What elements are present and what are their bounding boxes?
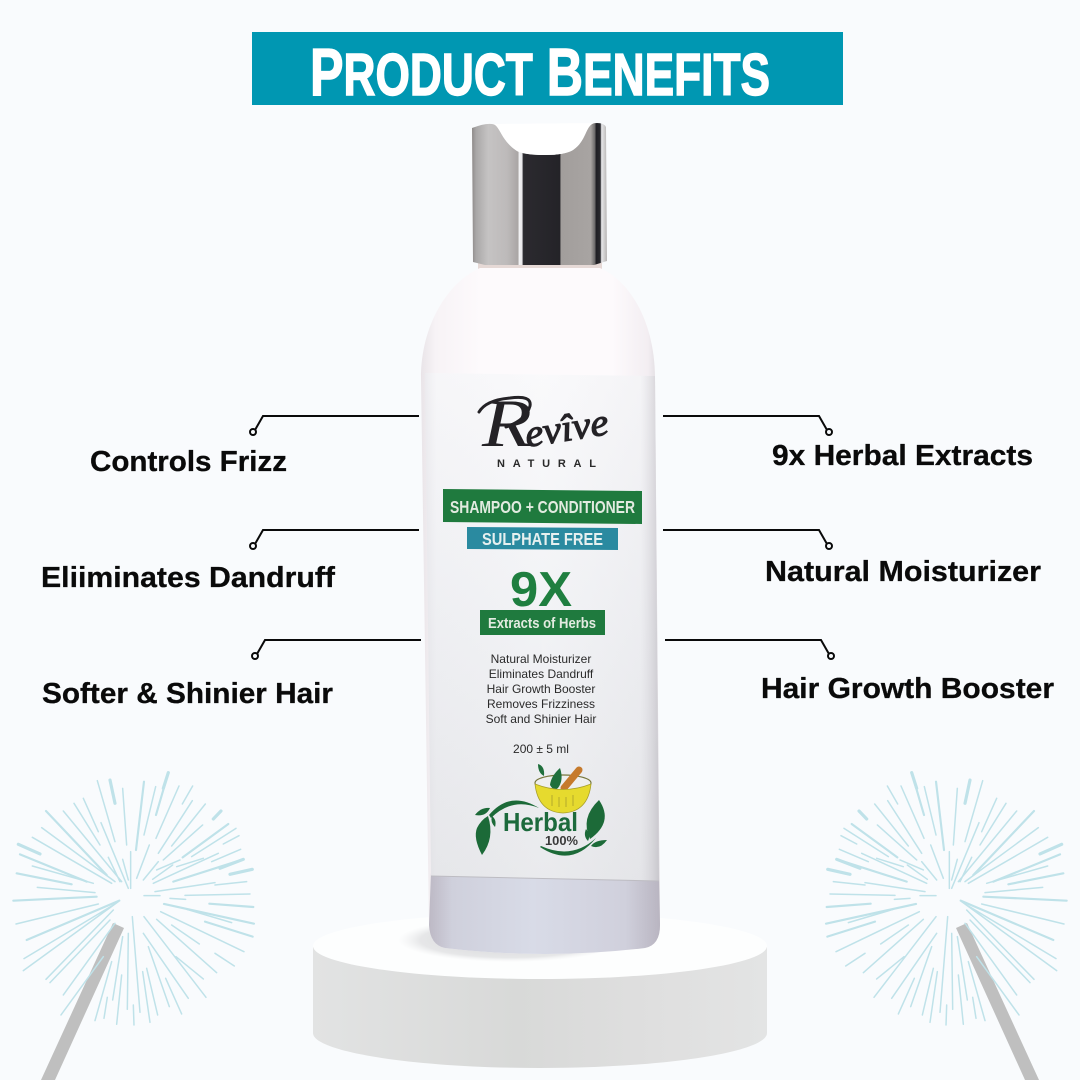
9X heading: 9X xyxy=(510,563,572,617)
label benefits list: 200 ± 5 ml xyxy=(513,742,569,756)
title banner: PRODUCT BENEFITS xyxy=(310,35,770,110)
sparkler left xyxy=(13,773,254,1080)
product bottle xyxy=(421,123,660,954)
callout: Eliiminates Dandruff xyxy=(41,530,419,594)
label benefits list xyxy=(486,652,596,756)
bottle base xyxy=(429,872,660,954)
herbal 100% badge: Herbal xyxy=(503,807,578,837)
bottle cap xyxy=(472,123,607,265)
label band: shampoo + conditioner: SHAMPOO + CONDITIONER xyxy=(450,497,635,517)
icon: left leaves xyxy=(475,800,539,855)
logo: Revive Natural xyxy=(479,385,612,470)
logo: Revive Natural: evîve xyxy=(522,401,612,456)
label benefits list: Natural Moisturizer xyxy=(491,652,591,666)
callout: Softer & Shinier Hair xyxy=(42,640,421,710)
herbal 100% badge xyxy=(475,764,607,856)
callout: Softer & Shinier Hair: Softer & Shinier Hair xyxy=(42,678,333,710)
callout: Natural Moisturizer: Natural Moisturizer xyxy=(765,556,1041,588)
callout: Eliiminates Dandruff: Eliiminates Dandruff xyxy=(41,562,335,594)
callout: Controls Frizz xyxy=(90,416,419,478)
label benefits list: Eliminates Dandruff xyxy=(489,667,594,681)
label band: sulphate free: SULPHATE FREE xyxy=(482,529,603,549)
sparkler right xyxy=(826,773,1067,1080)
label benefits list: Removes Frizziness xyxy=(487,697,595,711)
callout: 9x Herbal Extracts xyxy=(663,416,1033,472)
label benefits list: Hair Growth Booster xyxy=(487,682,595,696)
icon: right leaves xyxy=(540,800,607,856)
icon: mortar and pestle xyxy=(535,764,591,813)
bottle neck xyxy=(478,262,602,271)
callout: 9x Herbal Extracts: 9x Herbal Extracts xyxy=(772,440,1033,472)
callout: Controls Frizz: Controls Frizz xyxy=(90,446,287,478)
label band: shampoo + conditioner xyxy=(443,489,642,524)
label xyxy=(425,373,659,881)
bottle body xyxy=(421,268,660,954)
podium xyxy=(313,913,767,1068)
callout: Hair Growth Booster: Hair Growth Booster xyxy=(761,673,1054,705)
logo: Revive Natural: NATURAL xyxy=(497,458,596,470)
callout: Natural Moisturizer xyxy=(663,530,1041,588)
logo: Revive Natural: R xyxy=(481,385,532,461)
herbal 100% badge: 100% xyxy=(545,833,578,848)
label band: extracts of herbs xyxy=(480,610,605,635)
label band: extracts of herbs: Extracts of Herbs xyxy=(488,616,596,632)
label benefits list: Soft and Shinier Hair xyxy=(486,712,596,726)
callout: Hair Growth Booster xyxy=(665,640,1054,705)
